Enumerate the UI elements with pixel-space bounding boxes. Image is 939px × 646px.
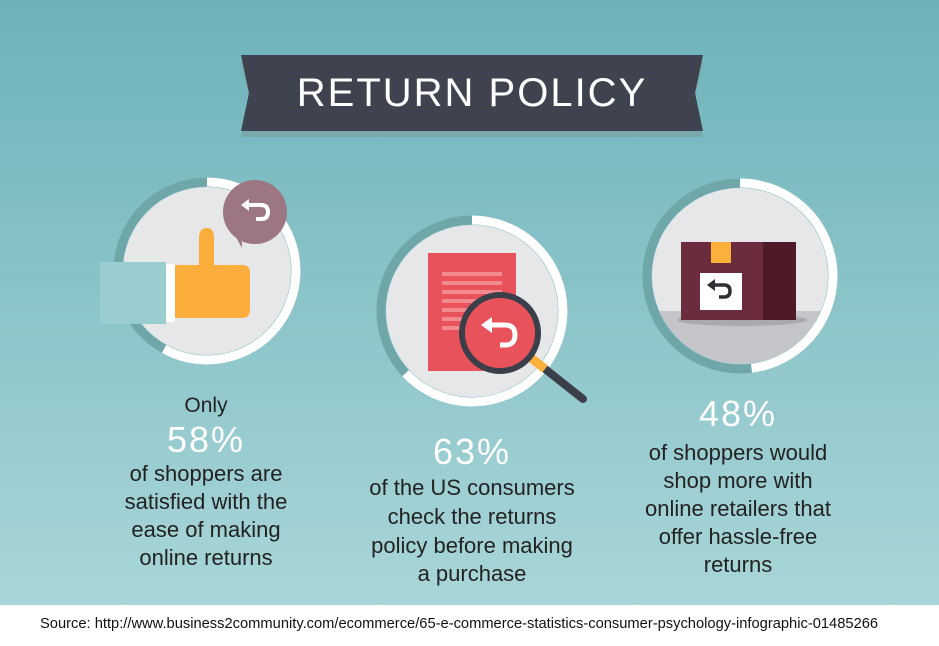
text block: 58%: of shoppers are [130,461,282,486]
text block: 58%: online returns [139,545,273,570]
text block: 48%: of shoppers would [649,440,827,465]
text block: 63%: policy before making [371,533,573,558]
panel: hassle-free box icon [647,183,833,371]
text block: 63% [369,431,575,586]
text block: 58% [125,394,287,570]
text block: 48%: returns [704,552,772,577]
text block: 63%: 63% [433,431,511,472]
source text: Source: http://www.business2community.com/ecommerce/65-e-commerce-statistics-consumer-psychology-infographic-01485266 [40,616,878,632]
title banner: RETURN POLICY [297,71,647,115]
text block: 58%: satisfied with the [125,489,287,514]
text block: 58%: ease of making [131,517,281,542]
text block: 63%: check the returns [388,504,556,529]
text block: 48%: online retailers that [645,496,831,521]
title banner [241,55,703,137]
text block: 48%: 48% [699,393,777,434]
text block: 58%: Only [184,394,228,417]
panel: policy check icon [381,220,583,402]
text block: 63%: of the US consumers [369,475,575,500]
text block: 48%: offer hassle-free [659,524,817,549]
text block: 58%: 58% [167,419,245,460]
panel: satisfied shoppers icon [100,180,296,360]
text block: 48%: shop more with [663,468,813,493]
text block: 48% [645,393,831,577]
text block: 63%: a purchase [418,561,526,586]
